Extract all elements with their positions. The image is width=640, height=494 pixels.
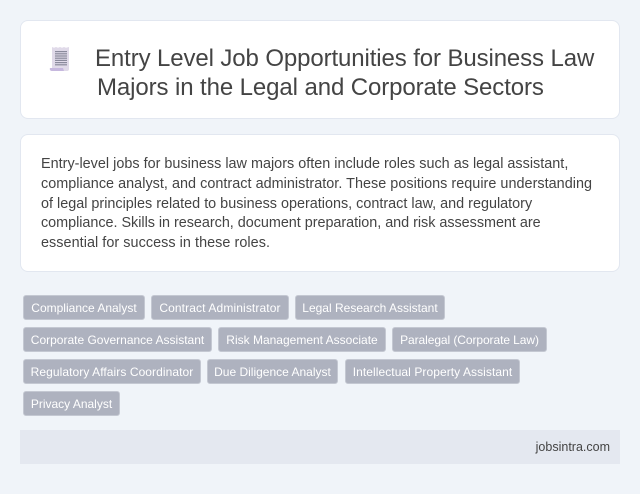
tag: Corporate Governance Assistant xyxy=(23,327,212,352)
tag: Compliance Analyst xyxy=(23,295,145,320)
tag: Due Diligence Analyst xyxy=(207,359,338,384)
text block: description: compliance analyst, and contract administrator. These positions require understanding xyxy=(41,176,592,192)
title xyxy=(95,45,594,101)
tag: Risk Management Associate xyxy=(218,327,386,352)
tag: Paralegal (Corporate Law): Paralegal (Corporate Law) xyxy=(400,333,539,347)
tag: Due Diligence Analyst: Due Diligence Analyst xyxy=(214,365,331,379)
text block: description: compliance. Skills in research, document preparation, and risk assessment are xyxy=(41,215,541,231)
tag: Risk Management Associate: Risk Management Associate xyxy=(226,333,378,347)
title: Majors in the Legal and Corporate Sectors xyxy=(97,74,544,101)
tag: Paralegal (Corporate Law) xyxy=(392,327,547,352)
footer bar xyxy=(20,430,620,464)
text block: description xyxy=(41,156,592,251)
tag: Regulatory Affairs Coordinator: Regulatory Affairs Coordinator xyxy=(31,365,193,379)
tag: Legal Research Assistant xyxy=(295,295,445,320)
title: Entry Level Job Opportunities for Business Law xyxy=(95,45,594,72)
tag: Regulatory Affairs Coordinator xyxy=(23,359,201,384)
tag: Corporate Governance Assistant: Corporate Governance Assistant xyxy=(31,333,204,347)
tag: Privacy Analyst xyxy=(23,391,120,416)
tag: Contract Administrator xyxy=(151,295,289,320)
panel: description xyxy=(20,134,620,272)
text block: description: of legal principles related to business operations, contract law, and regulatory xyxy=(41,196,532,212)
tag: Intellectual Property Assistant: Intellectual Property Assistant xyxy=(353,365,512,379)
tag: Contract Administrator: Contract Administrator xyxy=(159,301,281,315)
icon: document scroll xyxy=(50,47,69,71)
text block: description: Entry-level jobs for business law majors often include roles such as legal assistant, xyxy=(41,156,568,172)
panel: header xyxy=(20,20,620,119)
tag: Privacy Analyst: Privacy Analyst xyxy=(31,397,112,411)
tag: Compliance Analyst: Compliance Analyst xyxy=(31,301,137,315)
tag list xyxy=(23,295,547,416)
text block: description: essential for success in these roles. xyxy=(41,235,270,251)
tag: Legal Research Assistant: Legal Research Assistant xyxy=(302,301,438,315)
footer: site name: jobsintra.com xyxy=(536,440,610,454)
tag: Intellectual Property Assistant xyxy=(345,359,520,384)
